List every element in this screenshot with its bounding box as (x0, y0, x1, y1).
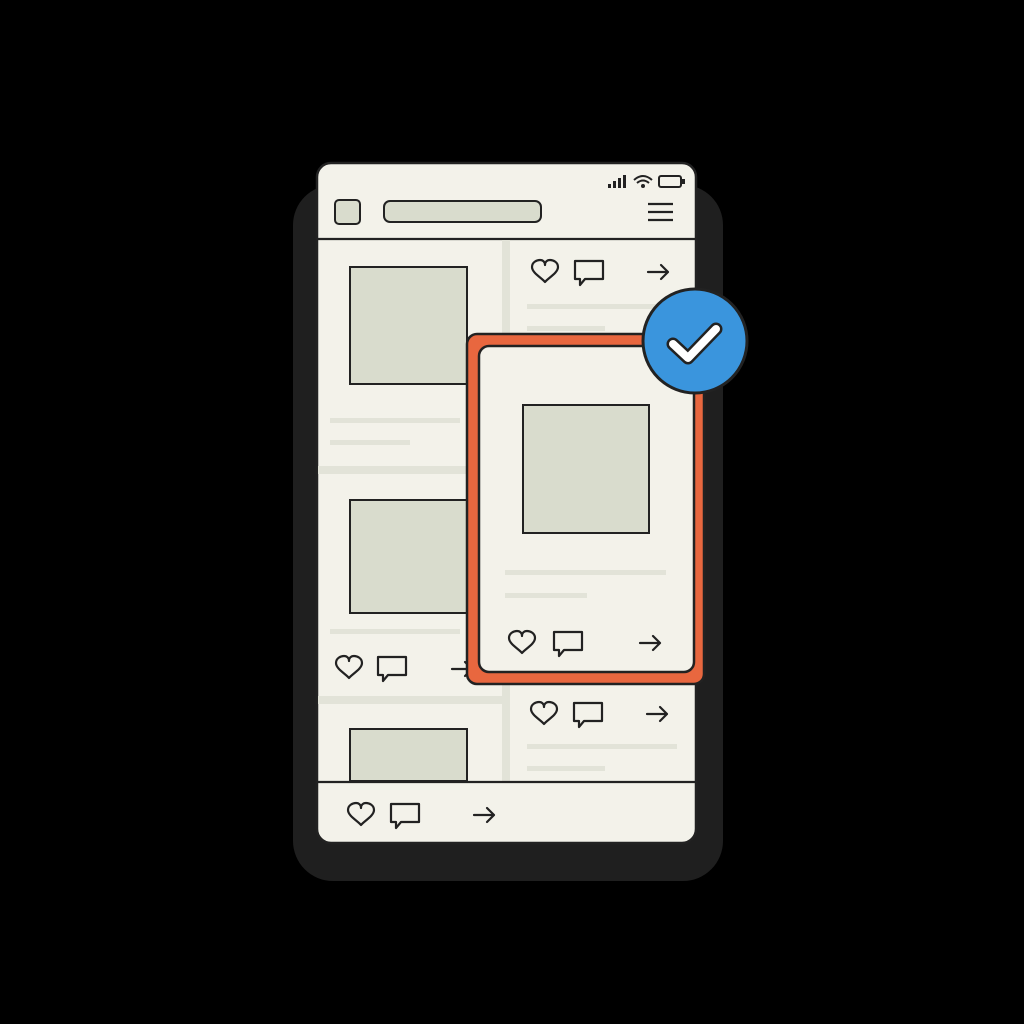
highlighted card (467, 334, 704, 684)
icon: verified check (643, 289, 747, 393)
right posts (532, 260, 558, 282)
left posts (350, 267, 467, 384)
phone shadow (293, 185, 723, 881)
bottom bar (317, 781, 696, 783)
column divider & bands (502, 240, 510, 781)
phone (317, 163, 696, 843)
header (335, 200, 360, 224)
status bar icons (608, 175, 685, 188)
